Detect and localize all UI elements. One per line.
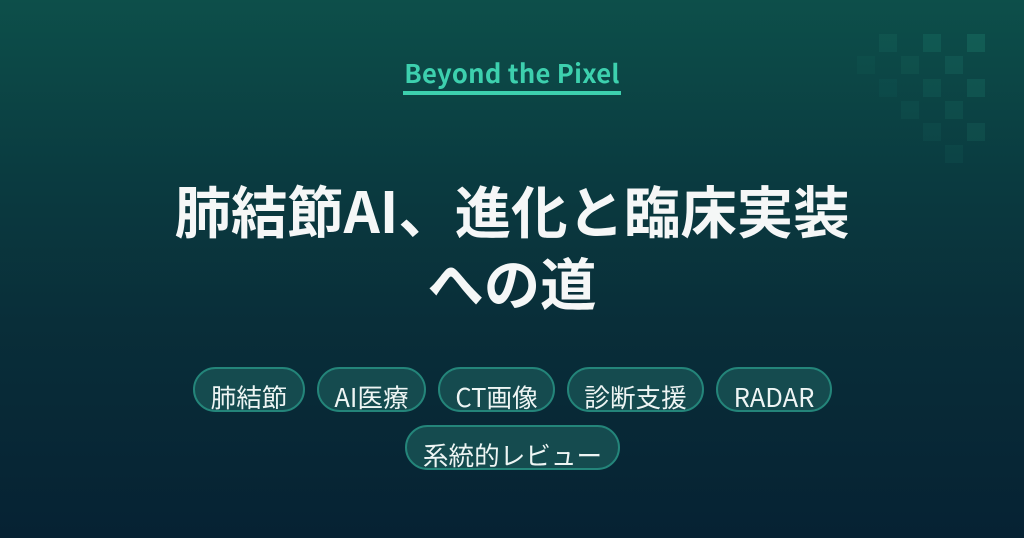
tags: [193, 367, 832, 473]
tag: RADAR: RADAR: [734, 378, 814, 415]
tag: 系統的レビュー: 系統的レビュー: [423, 436, 602, 473]
tag: AI医療: [317, 367, 426, 412]
tag: 系統的レビュー: [405, 425, 620, 470]
decorative pixel grid: [879, 34, 985, 141]
title: への道: [427, 241, 597, 322]
tag: AI医療: AI医療: [334, 378, 409, 415]
tag: 肺結節: 肺結節: [211, 378, 287, 415]
tag: RADAR: [716, 367, 832, 412]
tag: CT画像: [438, 367, 555, 412]
tag: 肺結節: [193, 367, 305, 412]
tag: CT画像: CT画像: [455, 378, 538, 415]
brand label with underline: Beyond the Pixel: [404, 54, 620, 91]
title: [174, 169, 850, 322]
tag: 診断支援: [567, 367, 704, 412]
tag: 診断支援: 診断支援: [584, 378, 687, 415]
title: 肺結節AI、進化と臨床実装: [174, 169, 850, 250]
